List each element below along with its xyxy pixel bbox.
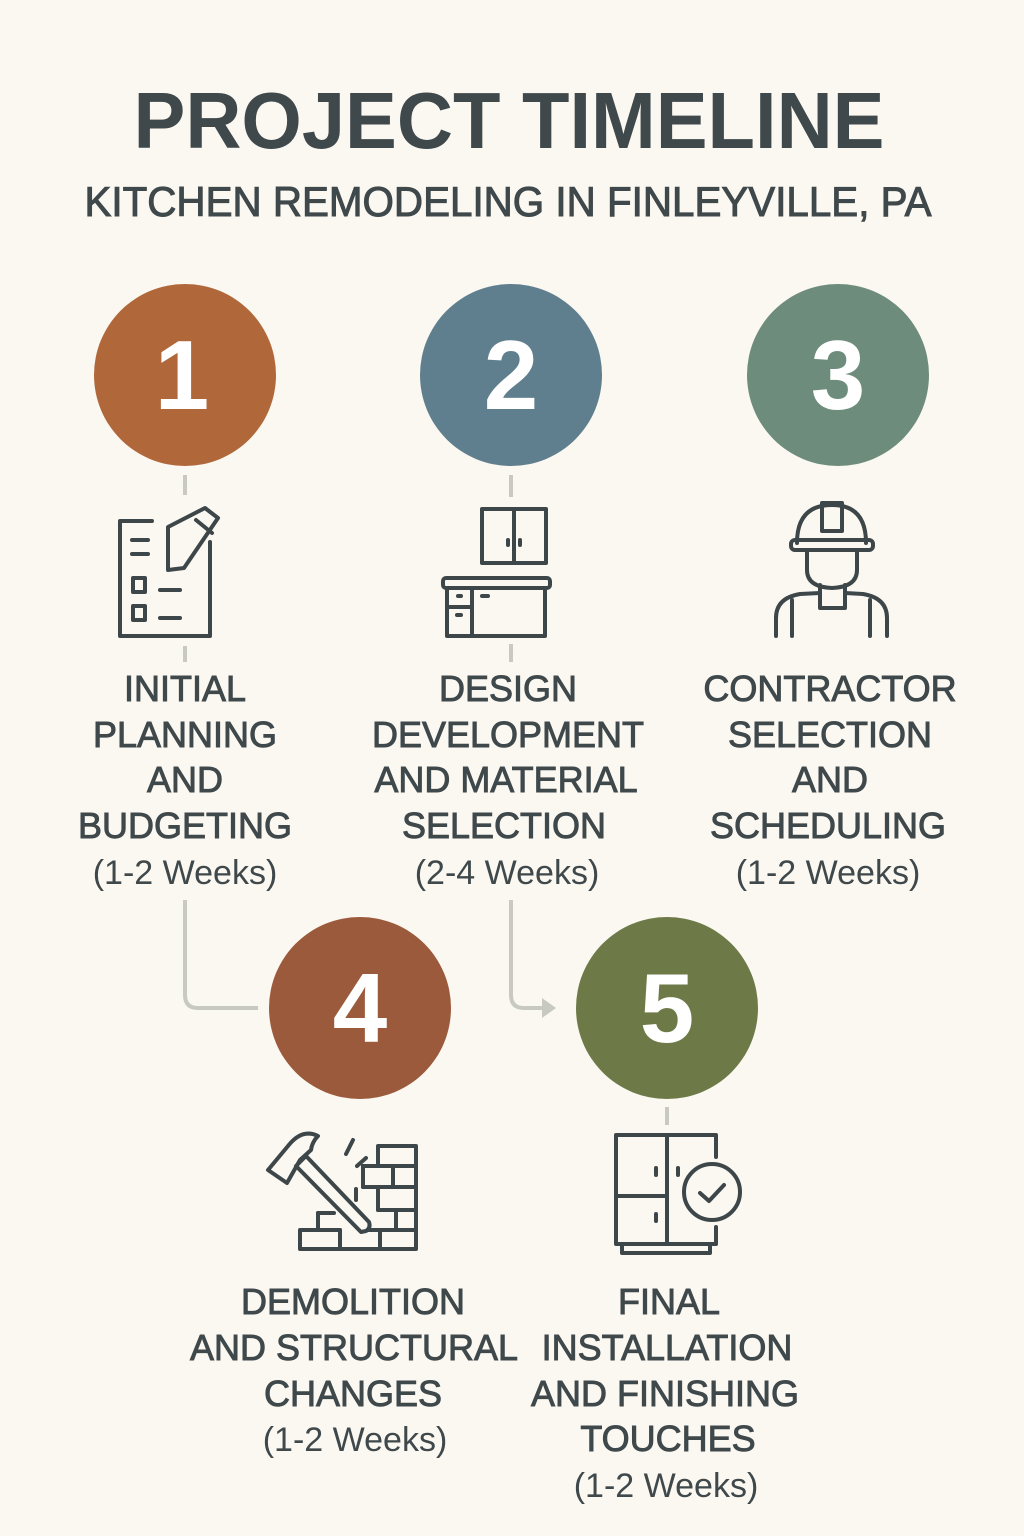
label: step 3 (703, 668, 957, 892)
label: step 5: AND FINISHING (531, 1373, 799, 1414)
title: PROJECT TIMELINE (134, 76, 884, 165)
label: step 3: (1-2 Weeks) (736, 854, 920, 892)
step 2 (372, 284, 644, 892)
label: step 1: INITIAL (124, 668, 246, 709)
step 2: 2 (484, 320, 538, 430)
label: step 4 (190, 1281, 518, 1459)
label: step 2: DESIGN (439, 668, 577, 709)
label: step 5: INSTALLATION (542, 1327, 792, 1368)
icon: cabinets (443, 509, 550, 636)
connectors (185, 475, 667, 1125)
step 4 (190, 917, 518, 1459)
step 3: 3 (811, 320, 865, 430)
label: step 4: AND STRUCTURAL (190, 1327, 518, 1368)
icon: checklist (120, 508, 218, 636)
arrow: to step 5 (542, 998, 556, 1018)
subtitle: KITCHEN REMODELING IN FINLEYVILLE, PA (84, 178, 932, 225)
step 3 (703, 284, 957, 892)
step 5 (531, 917, 799, 1505)
step 5: 5 (640, 953, 694, 1063)
label: step 1: PLANNING (93, 714, 277, 755)
label: step 1: (1-2 Weeks) (93, 854, 277, 892)
label: step 1: BUDGETING (78, 805, 292, 846)
step 1: 1 (155, 320, 209, 430)
label: step 4: CHANGES (264, 1373, 442, 1414)
label: step 3: SCHEDULING (710, 805, 946, 846)
icon: cabinet with check (616, 1135, 740, 1253)
label: step 2: DEVELOPMENT (372, 714, 644, 755)
label: step 5: (1-2 Weeks) (574, 1467, 758, 1505)
label: step 5 (531, 1281, 799, 1505)
label: step 5: TOUCHES (580, 1418, 756, 1459)
label: step 2: (2-4 Weeks) (415, 854, 599, 892)
label: step 3: AND (792, 759, 868, 800)
label: step 4: DEMOLITION (241, 1281, 465, 1322)
label: step 2: SELECTION (402, 805, 606, 846)
label: step 4: (1-2 Weeks) (263, 1421, 447, 1459)
step 1 (78, 284, 292, 892)
icon: hammer and bricks (268, 1134, 416, 1249)
step 4: 4 (333, 953, 387, 1063)
label: step 2: AND MATERIAL (374, 759, 638, 800)
label: step 3: CONTRACTOR (703, 668, 957, 709)
icon: worker (776, 503, 887, 636)
label: step 5: FINAL (618, 1281, 720, 1322)
label: step 3: SELECTION (728, 714, 932, 755)
label: step 1: AND (147, 759, 223, 800)
label: step 2 (372, 668, 644, 892)
label: step 1 (78, 668, 292, 892)
